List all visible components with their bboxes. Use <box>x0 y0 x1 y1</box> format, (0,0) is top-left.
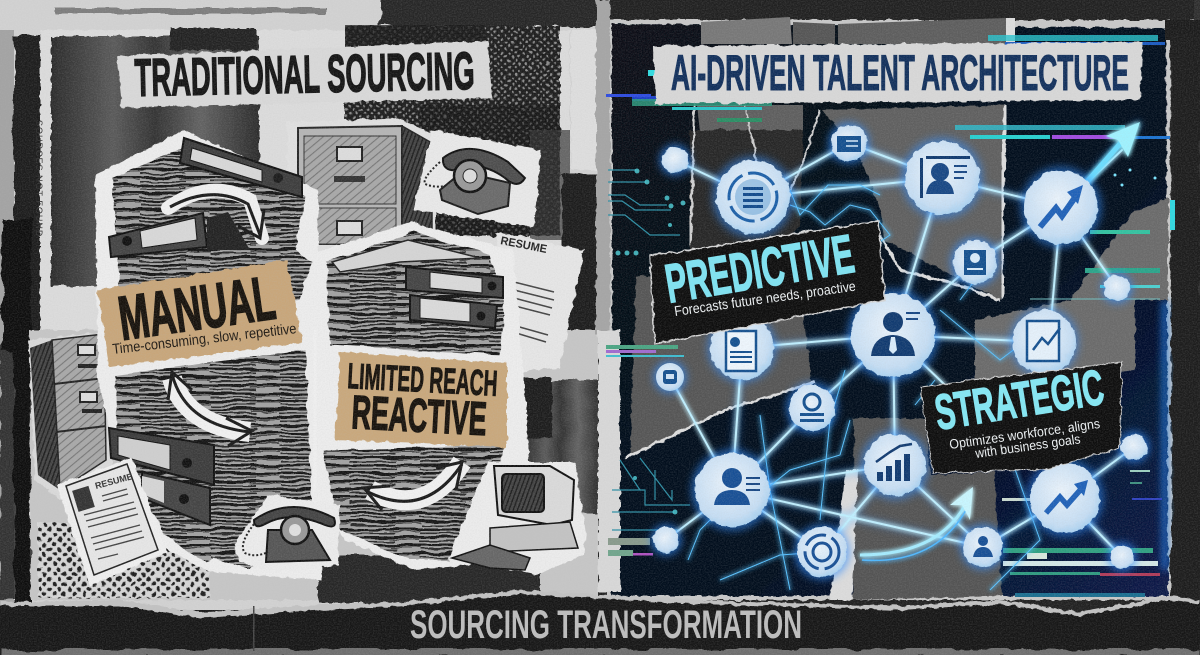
node: growth trend <box>1026 459 1104 537</box>
callout: limited reach reactive <box>335 352 507 447</box>
arrow: rising network arrow <box>1085 122 1140 184</box>
heading: sourcing transformation: SOURCING TRANSFORMATION <box>410 603 802 647</box>
icon: top-right resume <box>496 232 584 372</box>
collage background paper: SOURCES NOT FOUND <box>34 120 44 237</box>
network connection lines <box>666 122 1140 590</box>
node: small document <box>828 122 870 164</box>
footer banner <box>0 590 1200 655</box>
node: chart document <box>1009 307 1079 377</box>
node: candidate two <box>691 449 773 531</box>
node: candidate profile <box>901 137 983 219</box>
heading: traditional sourcing: TRADITIONAL SOURCING <box>134 42 475 108</box>
arrow: curved growth <box>860 487 973 560</box>
heading: predictive: PREDICTIVE <box>661 222 858 315</box>
callout: predictive <box>650 221 885 344</box>
arrow: left stack cycle <box>168 372 252 446</box>
icon: vintage computer <box>448 462 586 575</box>
text: strategic description: Optimizes workforce, aligns <box>948 416 1101 452</box>
collage background paper <box>0 0 605 610</box>
callout: manual <box>98 260 302 367</box>
node: small upper right <box>1118 431 1150 463</box>
node: resume document <box>707 313 777 383</box>
node: search <box>786 382 838 434</box>
network nodes <box>650 122 1150 580</box>
heading: manual: MANUAL <box>114 264 279 354</box>
node: small person <box>960 524 1006 570</box>
node: document badge <box>950 237 1000 287</box>
node: small bottom-left <box>650 524 682 556</box>
icon: binder stack right <box>314 222 530 570</box>
arrow: right stack cycle <box>362 462 462 510</box>
icon: top filing cabinet <box>286 118 436 262</box>
icon: left filing cabinet <box>28 332 112 500</box>
node: executive person <box>847 289 939 381</box>
text: predictive description: Forecasts future needs, proactive <box>673 278 857 319</box>
node: small right <box>1101 272 1133 304</box>
heading: traditional sourcing <box>117 41 492 108</box>
icon: top-right resume: RESUME <box>499 235 548 256</box>
node: rising bars <box>860 430 930 500</box>
callout: strategic <box>920 359 1122 473</box>
callout: strategic: with business goals <box>973 431 1082 461</box>
node: badge <box>653 360 687 394</box>
arrow: top binder curve <box>168 191 264 238</box>
text: limited reach: LIMITED REACH <box>347 355 499 404</box>
node: small top-left <box>659 144 691 176</box>
node: small lower right <box>1107 542 1137 572</box>
panel: traditional sourcing <box>0 0 605 610</box>
text: manual description: Time-consuming, slow, repetitive <box>112 321 297 358</box>
icon: bottom-left resume: RESUME <box>94 471 134 491</box>
node: growth chart <box>1020 166 1102 248</box>
node: data target <box>712 156 794 238</box>
panel: ai-driven talent architecture <box>596 0 1200 655</box>
collage background <box>596 0 1200 655</box>
icon: bottom-left resume <box>57 458 167 586</box>
icon: binder stack left <box>95 130 322 580</box>
decoration: circuit and glitch bars <box>606 35 1175 597</box>
text: reactive: REACTIVE <box>350 385 488 445</box>
node: target dial <box>794 524 850 580</box>
icon: bottom telephone <box>234 495 340 573</box>
icon: top telephone <box>413 130 541 227</box>
